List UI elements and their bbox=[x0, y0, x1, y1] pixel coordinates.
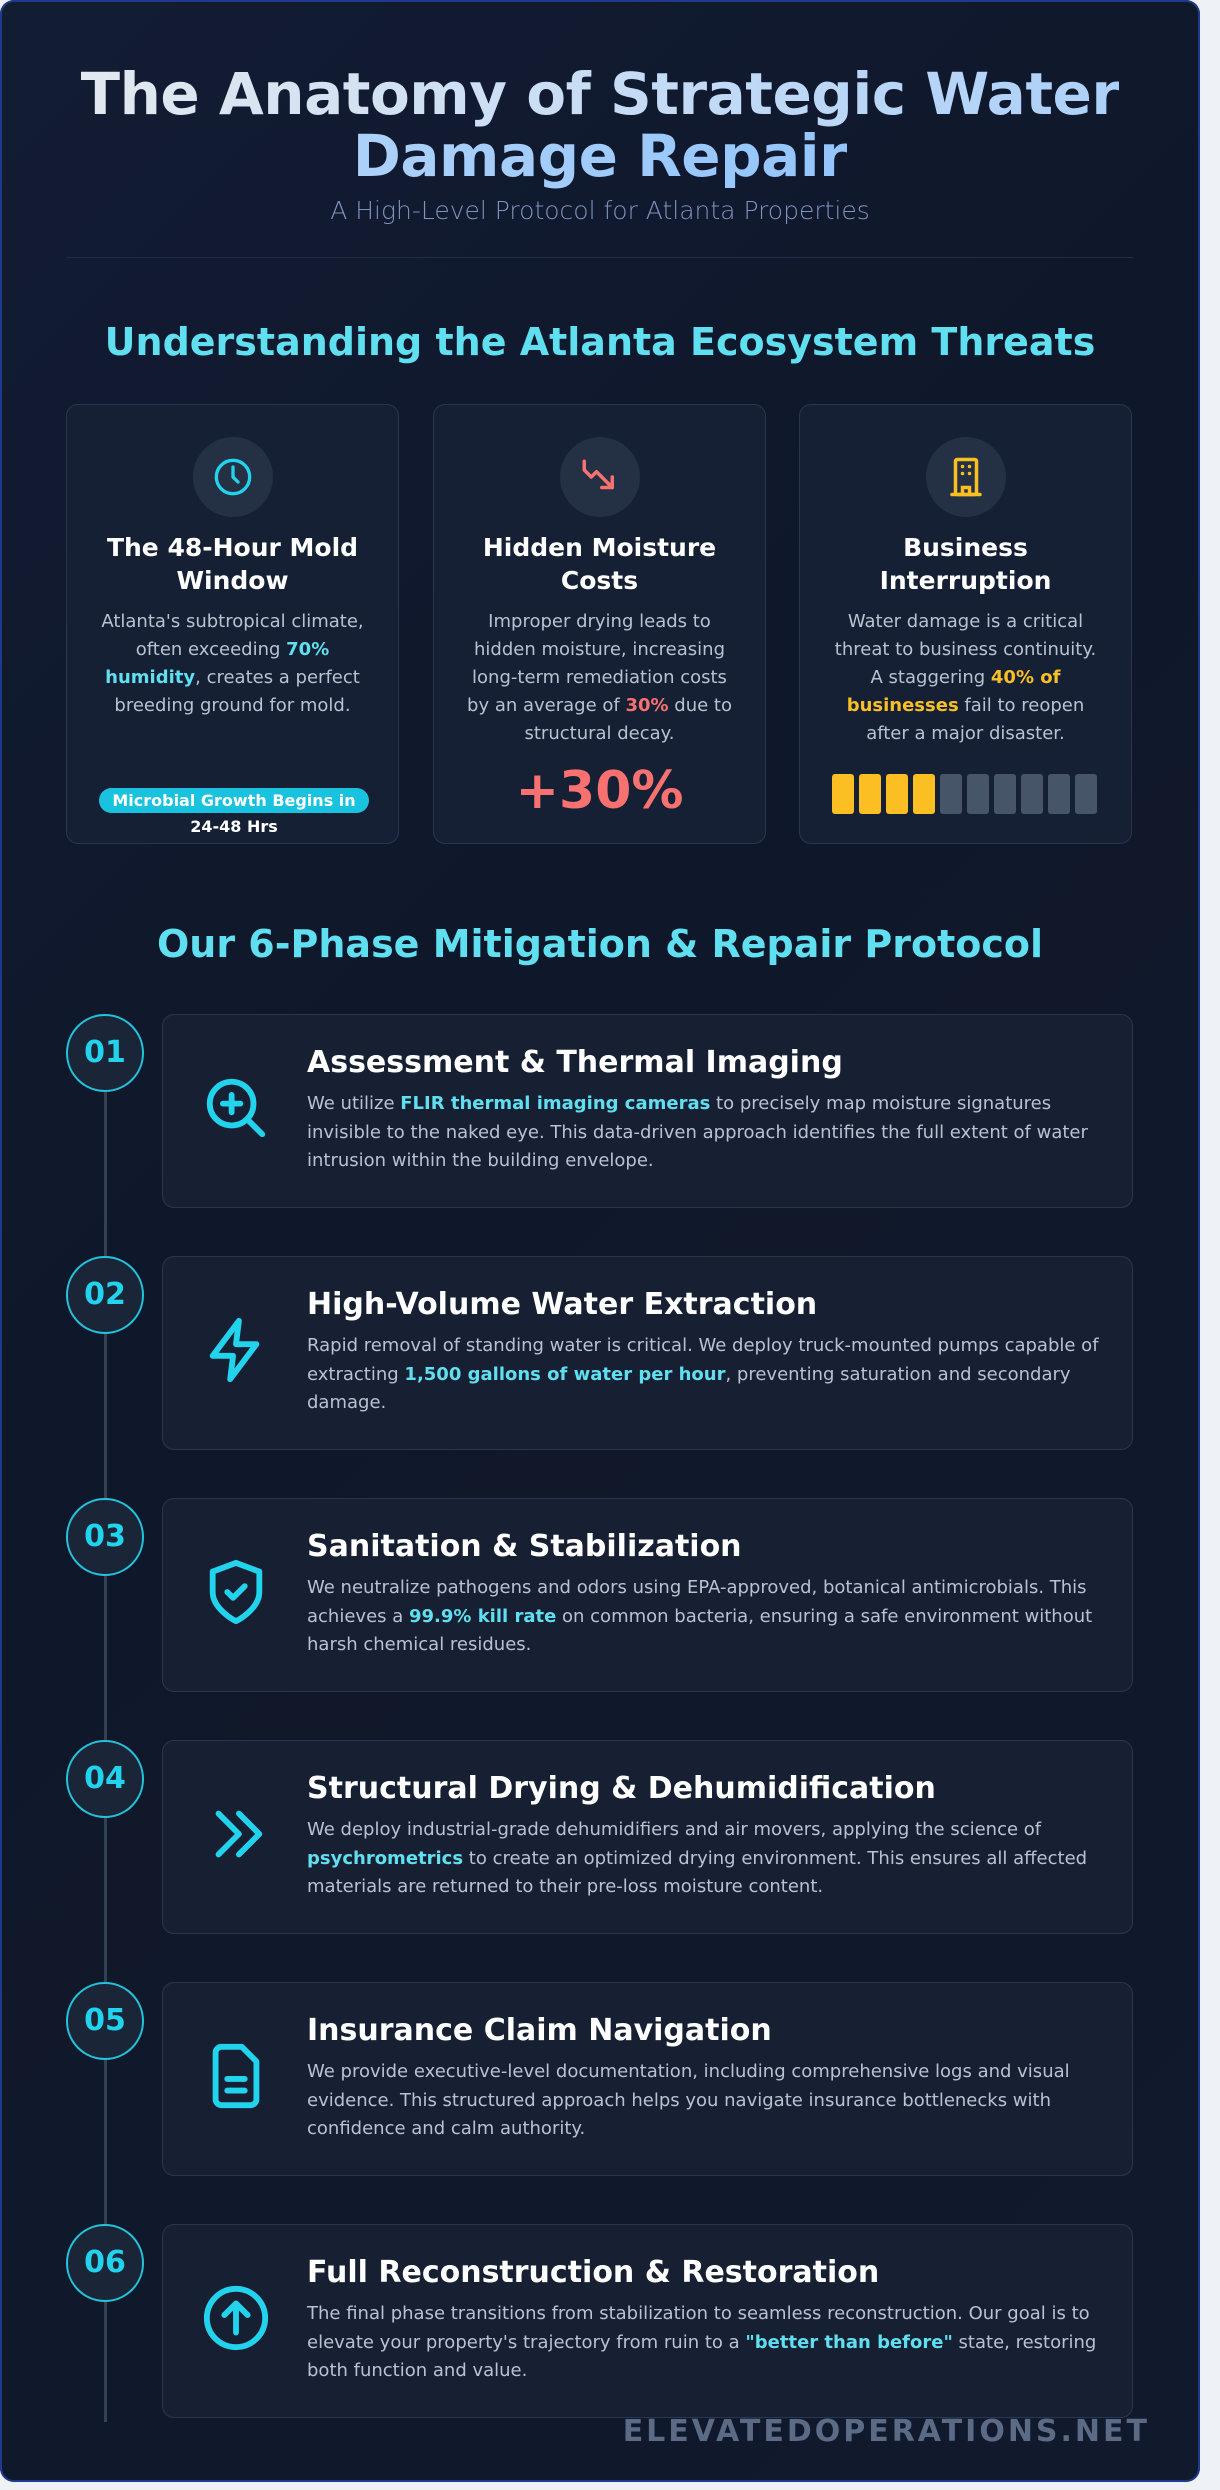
heading: protocol: Our 6-Phase Mitigation & Repair Protocol bbox=[157, 922, 1043, 966]
phase 02: 02 bbox=[84, 1277, 126, 1312]
phase 01: 01 bbox=[84, 1035, 126, 1070]
stat: +30% bbox=[515, 761, 684, 821]
panel: phase 02 bbox=[162, 1256, 1133, 1450]
phase 01 bbox=[66, 1014, 144, 1092]
panel: phase 01 bbox=[162, 1014, 1133, 1208]
subtitle: A High-Level Protocol for Atlanta Properties bbox=[330, 196, 870, 225]
card text: Water damage is a critical threat to business continuity. A staggering 40% of businesses fail to reopen after a major disaster. bbox=[835, 611, 1096, 744]
icon: chevrons bbox=[216, 1810, 262, 1858]
panel: phase 06: Full Reconstruction & Restoration bbox=[307, 2255, 879, 2290]
panel: phase 05: We provide executive-level documentation, including comprehensive logs and visual evidence. This structured approach helps you navigate insurance bottlenecks with confidence and calm authority. bbox=[307, 2061, 1070, 2139]
panel: phase 04: Structural Drying & Dehumidification bbox=[307, 1771, 936, 1806]
panel: phase 03: Sanitation & Stabilization bbox=[307, 1529, 742, 1564]
card text: Atlanta's subtropical climate, often exceeding 70% humidity, creates a perfect breeding ground for mold. bbox=[101, 611, 364, 716]
panel: phase 04 bbox=[162, 1740, 1133, 1934]
icon: shield bbox=[210, 1560, 262, 1624]
icon: document bbox=[212, 2044, 260, 2108]
panel: mold window bbox=[66, 404, 399, 844]
badge: Microbial Growth Begins in bbox=[112, 791, 356, 810]
phase 05 bbox=[66, 1982, 144, 2060]
panel: phase 02: High-Volume Water Extraction bbox=[307, 1287, 817, 1322]
icon: clock bbox=[193, 437, 273, 517]
phase 03 bbox=[66, 1498, 144, 1576]
panel: phase 03 bbox=[162, 1498, 1133, 1692]
icon: arrow up circle bbox=[204, 2286, 268, 2350]
panel: phase 05 bbox=[162, 1982, 1133, 2176]
card title: Business Interruption bbox=[880, 533, 1051, 595]
heading: threats: Understanding the Atlanta Ecosystem Threats bbox=[105, 320, 1095, 364]
panel: phase 02: Rapid removal of standing water is critical. We deploy truck-mounted pumps capable of extracting 1,500 gallons of water per hour, preventing saturation and secondary damage. bbox=[307, 1335, 1099, 1413]
panel: business interruption bbox=[799, 404, 1132, 844]
title bbox=[81, 60, 1119, 190]
panel: phase 03: We neutralize pathogens and odors using EPA-approved, botanical antimicrobials. This achieves a 99.9% kill rate on common bacteria, ensuring a safe environment without harsh chemical residues. bbox=[307, 1577, 1092, 1655]
badge: 24-48 Hrs bbox=[190, 817, 278, 836]
phase 02 bbox=[66, 1256, 144, 1334]
phase 05: 05 bbox=[84, 2003, 126, 2038]
panel: phase 06: The final phase transitions from stabilization to seamless reconstruction. Our goal is to elevate your property's trajectory from ruin to a "better than before" state, restoring both function and value. bbox=[307, 2303, 1096, 2381]
panel: phase 04: We deploy industrial-grade dehumidifiers and air movers, applying the science of psychrometrics to create an optimized drying environment. This ensures all affected materials are returned to their pre-loss moisture content. bbox=[307, 1819, 1087, 1897]
icon: magnifier bbox=[206, 1078, 266, 1138]
title: The Anatomy of Strategic Water bbox=[81, 60, 1119, 128]
panel: hidden moisture bbox=[433, 404, 766, 844]
title: Damage Repair bbox=[353, 122, 847, 190]
icon: trend down bbox=[560, 437, 640, 517]
phase 06: 06 bbox=[84, 2245, 126, 2280]
card title: The 48-Hour Mold Window bbox=[107, 533, 358, 595]
phase 04: 04 bbox=[84, 1761, 126, 1796]
footer brand: ELEVATEDOPERATIONS.NET bbox=[623, 2414, 1150, 2449]
icon: lightning bbox=[210, 1318, 260, 1382]
timeline line bbox=[104, 1092, 107, 2422]
badge bbox=[99, 788, 369, 836]
panel: phase 01: Assessment & Thermal Imaging bbox=[307, 1045, 843, 1080]
card text: Improper drying leads to hidden moisture, increasing long-term remediation costs by an average of 30% due to structural decay. bbox=[467, 611, 732, 744]
panel: phase 05: Insurance Claim Navigation bbox=[307, 2013, 772, 2048]
bar chart bbox=[832, 774, 1097, 814]
phase 04 bbox=[66, 1740, 144, 1818]
panel: phase 06 bbox=[162, 2224, 1133, 2418]
panel: phase 01: We utilize FLIR thermal imaging cameras to precisely map moisture signatures invisible to the naked eye. This data-driven approach identifies the full extent of water intrusion within the building envelope. bbox=[307, 1093, 1088, 1171]
card title: Hidden Moisture Costs bbox=[483, 533, 716, 595]
phase 03: 03 bbox=[84, 1519, 126, 1554]
phase 06 bbox=[66, 2224, 144, 2302]
icon: building bbox=[926, 437, 1006, 517]
